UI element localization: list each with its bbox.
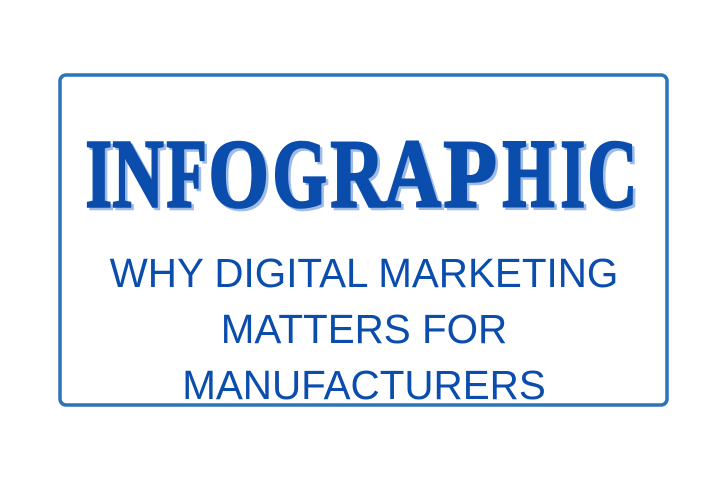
title: INFOGRAPHIC: G (275, 124, 329, 231)
subtitle: why digital marketing matters for manufacturers (110, 250, 618, 408)
title: INFOGRAPHIC: I (560, 120, 585, 228)
title: INFOGRAPHIC: I (86, 121, 112, 229)
title: INFOGRAPHIC: A (384, 121, 441, 228)
title: INFOGRAPHIC: P (446, 123, 499, 230)
title: INFOGRAPHIC: F (169, 122, 209, 230)
title: INFOGRAPHIC: I (88, 123, 114, 231)
title: INFOGRAPHIC: H (502, 122, 555, 229)
title: INFOGRAPHIC: O (211, 123, 271, 230)
subtitle: why digital marketing matters for manufacturers: MATTERS FOR (221, 306, 507, 352)
title: INFOGRAPHIC: F (166, 120, 207, 228)
title: INFOGRAPHIC: P (444, 120, 497, 228)
title: INFOGRAPHIC: R (333, 123, 388, 230)
title: INFOGRAPHIC: H (505, 124, 557, 231)
title: INFOGRAPHIC: C (588, 121, 637, 228)
subtitle: why digital marketing matters for manufacturers: MANUFACTURERS (182, 362, 546, 408)
title: INFOGRAPHIC: O (208, 120, 269, 227)
title: INFOGRAPHIC: N (115, 123, 166, 231)
panel: rounded border frame (60, 75, 667, 405)
title: INFOGRAPHIC (86, 120, 640, 231)
subtitle: why digital marketing matters for manufacturers: WHY DIGITAL MARKETING (110, 250, 618, 296)
title: INFOGRAPHIC: N (112, 121, 164, 228)
title: INFOGRAPHIC: C (590, 124, 640, 231)
title: INFOGRAPHIC: R (330, 120, 386, 228)
title: INFOGRAPHIC: I (563, 122, 588, 230)
title: INFOGRAPHIC: A (386, 124, 443, 231)
title: INFOGRAPHIC: G (272, 122, 327, 228)
